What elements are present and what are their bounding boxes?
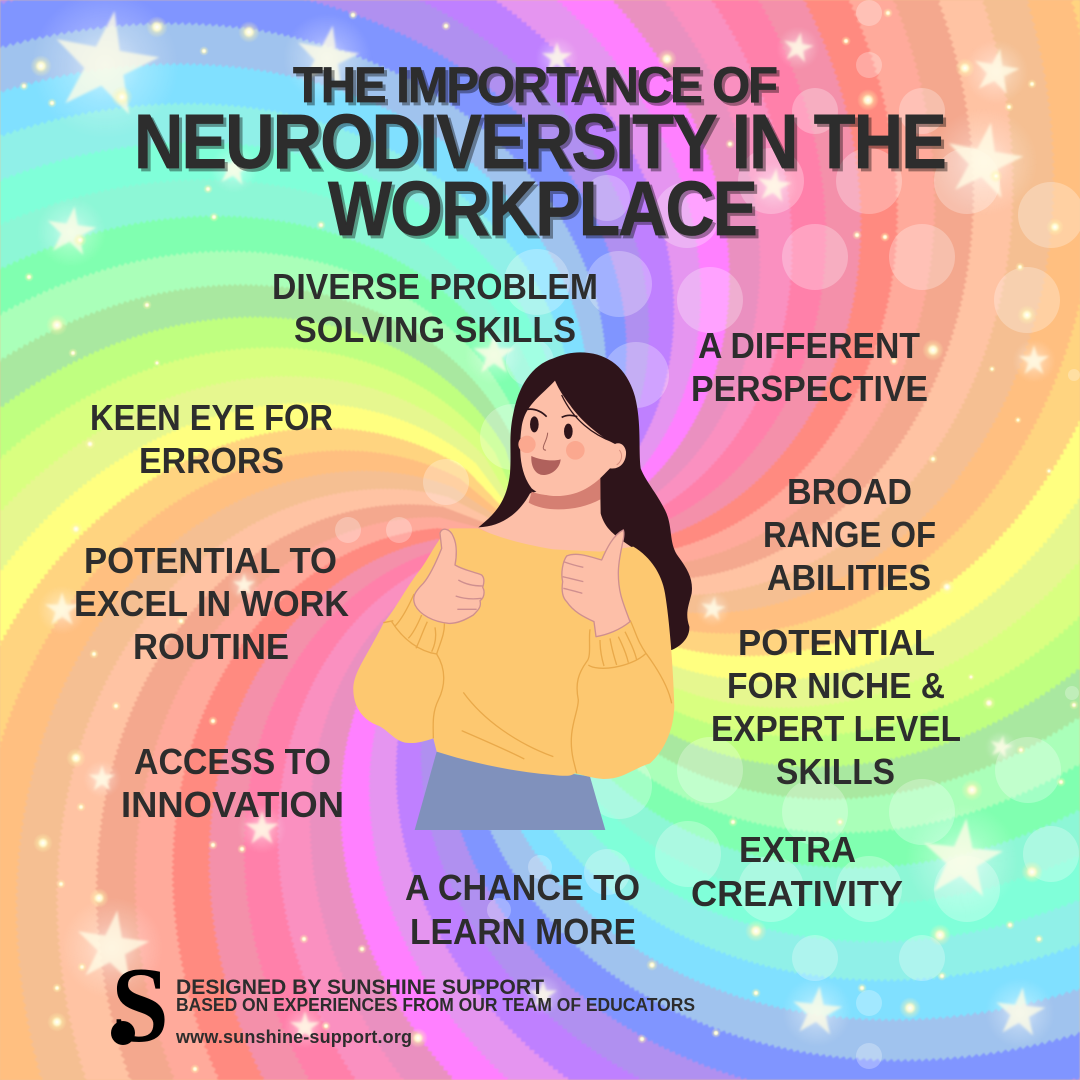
label: broad range of abilities: ABILITIES [767, 557, 931, 598]
label: potential to excel in work routine: POTENTIAL TO [84, 540, 337, 581]
face [520, 381, 626, 496]
label: broad range of abilities [763, 471, 936, 598]
label: keen eye for errors: ERRORS [139, 440, 284, 481]
label: broad range of abilities: RANGE OF [763, 514, 936, 555]
title: THE IMPORTANCE OF [293, 57, 776, 113]
icon: sunshine support logo: S [111, 946, 169, 1065]
label: extra creativity: EXTRA [739, 829, 856, 870]
right hand thumb up [562, 530, 630, 637]
title: WORKPLACE [328, 166, 756, 252]
hair [478, 352, 692, 650]
bokeh circles [335, 0, 1080, 1069]
label: diverse problem solving skills: DIVERSE PROBLEM [272, 266, 598, 307]
title: NEURODIVERSITY IN THE [134, 99, 945, 185]
label: a different perspective: PERSPECTIVE [691, 368, 928, 409]
label: access to innovation: INNOVATION [121, 784, 344, 825]
label: potential to excel in work routine: EXCEL IN WORK [74, 583, 349, 624]
illustration: woman giving two thumbs up [353, 352, 692, 830]
footer credits: DESIGNED BY SUNSHINE SUPPORT [176, 976, 544, 999]
left hand thumb up [414, 529, 484, 623]
footer credits: www.sunshine-support.org [175, 1027, 412, 1047]
skirt [415, 752, 605, 830]
label: a chance to learn more: A CHANCE TO [405, 867, 640, 908]
label: keen eye for errors [90, 397, 333, 481]
footer credits: BASED ON EXPERIENCES FROM OUR TEAM OF EDUCATORS [176, 994, 695, 1015]
label: a different perspective [691, 325, 928, 409]
label: potential for niche and expert level skills: POTENTIAL [738, 622, 935, 663]
neck shadow [529, 477, 600, 509]
label: diverse problem solving skills [272, 266, 598, 350]
label: potential to excel in work routine [74, 540, 349, 667]
sweater fold lines [383, 594, 672, 773]
label: a chance to learn more [405, 867, 640, 952]
label: a chance to learn more: LEARN MORE [410, 911, 636, 952]
label: potential for niche and expert level skills [711, 622, 961, 792]
label: extra creativity [691, 829, 903, 914]
title [134, 57, 945, 252]
neck and chest [478, 473, 633, 567]
footer credits [175, 976, 695, 1047]
label: potential to excel in work routine: ROUTINE [133, 626, 289, 667]
facial features [518, 395, 622, 475]
label: access to innovation [121, 741, 344, 825]
label: diverse problem solving skills: SOLVING SKILLS [294, 309, 576, 350]
label: potential for niche and expert level skills: SKILLS [776, 751, 895, 792]
label: a different perspective: A DIFFERENT [698, 325, 920, 366]
label: potential for niche and expert level skills: EXPERT LEVEL [711, 708, 961, 749]
label: extra creativity: CREATIVITY [691, 873, 903, 914]
label: access to innovation: ACCESS TO [134, 741, 331, 782]
label: broad range of abilities: BROAD [787, 471, 912, 512]
label: keen eye for errors: KEEN EYE FOR [90, 397, 333, 438]
label: potential for niche and expert level skills: FOR NICHE & [727, 665, 945, 706]
sweater [353, 528, 674, 779]
